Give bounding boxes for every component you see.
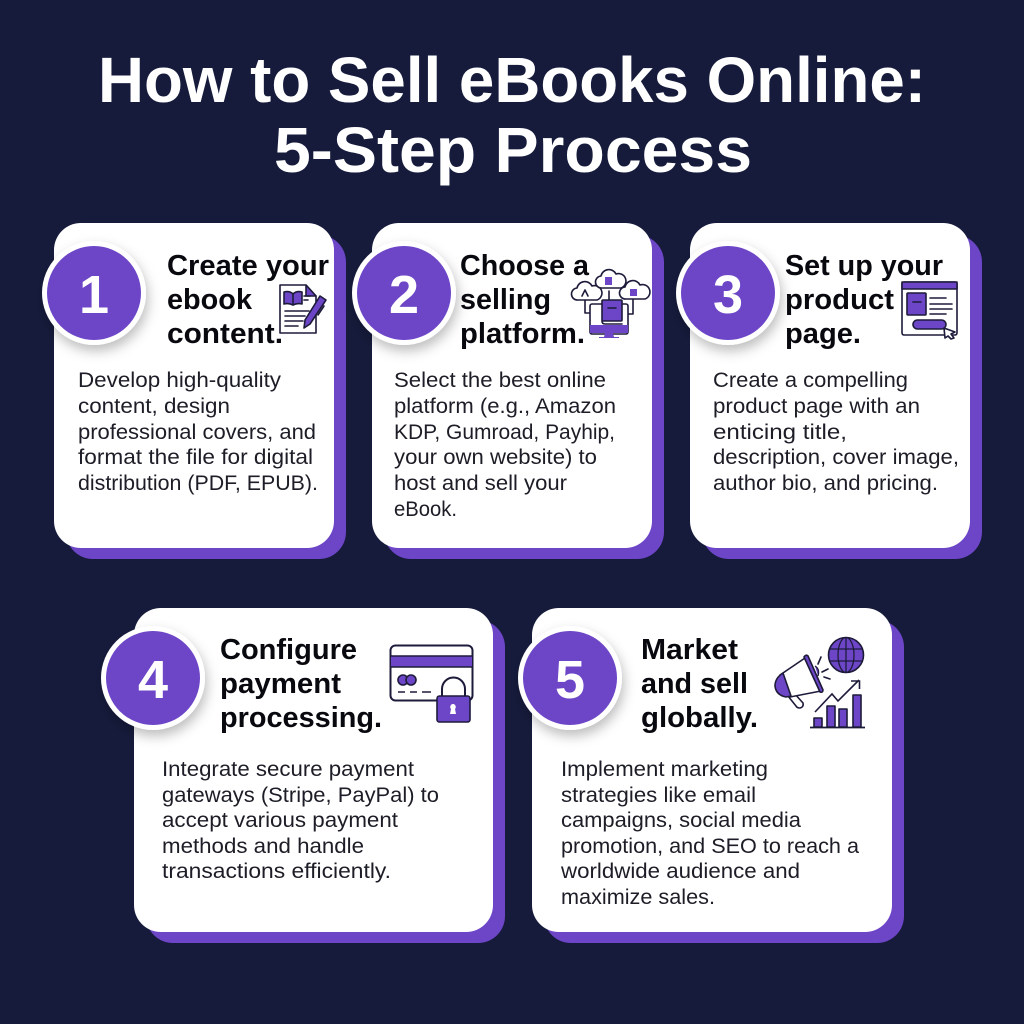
step 2 description: platform (e.g., Amazon	[394, 394, 616, 418]
step 3 description: description, cover image,	[713, 445, 959, 469]
icon: megaphone, globe and growth chart	[775, 638, 865, 728]
step 5 heading: and sell	[641, 668, 748, 700]
step 1 heading: ebook	[167, 284, 253, 316]
step 4 description: accept various payment	[162, 808, 398, 832]
icon: product web page	[902, 282, 957, 339]
title	[98, 44, 926, 186]
step 1 description: format the file for digital	[78, 445, 313, 469]
step 1 description: content, design	[78, 394, 230, 418]
step 5 description	[560, 757, 859, 909]
step 4 number badge	[101, 626, 205, 730]
step 2 description	[394, 368, 616, 521]
title: How to Sell eBooks Online:	[98, 44, 926, 116]
step 1 description: Develop high-quality	[78, 368, 281, 392]
step 1 number badge: 1	[79, 265, 109, 325]
step 3 heading	[785, 250, 943, 350]
title: 5-Step Process	[274, 114, 752, 186]
step 3 description: author bio, and pricing.	[713, 471, 938, 495]
step 3 number badge: 3	[713, 265, 743, 325]
step 4 description: transactions efficiently.	[162, 859, 391, 883]
step 4 heading: payment	[220, 668, 341, 700]
step 4 description: methods and handle	[162, 834, 364, 858]
step 2 description: Select the best online	[394, 368, 606, 392]
step 5 description: campaigns, social media	[561, 808, 801, 832]
panel: step 4	[101, 608, 505, 943]
step 2 heading: selling	[460, 284, 551, 316]
step 1 heading	[167, 250, 329, 350]
step 5 description: promotion, and SEO to reach a	[561, 834, 859, 858]
step 2 description: eBook.	[394, 497, 457, 521]
step 2 description: KDP, Gumroad, Payhip,	[394, 420, 615, 444]
step 4 heading: Configure	[220, 634, 357, 666]
step 5 description: worldwide audience and	[560, 859, 800, 883]
panel: step 2	[352, 223, 664, 559]
step 1 description: professional covers, and	[78, 420, 316, 444]
step 1 heading: Create your	[167, 250, 329, 282]
step 4 number badge: 4	[138, 650, 168, 710]
step 2 description: your own website) to	[394, 445, 597, 469]
step 5 description: maximize sales.	[561, 885, 715, 909]
step 3 description: product page with an	[713, 394, 920, 418]
step 2 number badge: 2	[389, 265, 419, 325]
step 5 heading: Market	[641, 634, 738, 666]
panel: step 5	[518, 608, 904, 943]
panel: step 3	[676, 223, 982, 559]
icon: credit card and padlock	[390, 646, 472, 722]
step 4 heading	[220, 634, 382, 734]
step 5 number badge	[518, 626, 622, 730]
step 2 description: host and sell your	[394, 471, 567, 495]
step 5 heading	[641, 634, 758, 734]
step 2 number badge	[352, 241, 456, 345]
step 4 heading: processing.	[220, 702, 382, 734]
step 2 heading	[460, 250, 590, 350]
step 3 number badge	[676, 241, 780, 345]
step 3 heading: product	[785, 284, 894, 316]
icon: ebook document and pen	[280, 285, 326, 333]
step 2 heading: Choose a	[460, 250, 590, 282]
step 5 heading: globally.	[641, 702, 758, 734]
step 4 description: Integrate secure payment	[162, 757, 414, 781]
step 3 description	[713, 368, 959, 495]
step 1 description	[78, 368, 318, 495]
icon: cloud platforms and monitor	[571, 270, 650, 338]
step 1 heading: content.	[167, 318, 283, 350]
step 2 heading: platform.	[460, 318, 585, 350]
step 3 description: enticing title,	[713, 420, 847, 444]
step 5 number badge: 5	[555, 650, 585, 710]
step 1 description: distribution (PDF, EPUB).	[78, 471, 318, 495]
step 4 description	[162, 757, 439, 883]
step 3 heading: page.	[785, 318, 861, 350]
step 5 description: strategies like email	[561, 783, 756, 807]
panel: step 1	[42, 223, 346, 559]
step 1 number badge	[42, 241, 146, 345]
step 3 heading: Set up your	[785, 250, 943, 282]
step 4 description: gateways (Stripe, PayPal) to	[162, 783, 439, 807]
step 5 description: Implement marketing	[561, 757, 768, 781]
step 3 description: Create a compelling	[713, 368, 908, 392]
